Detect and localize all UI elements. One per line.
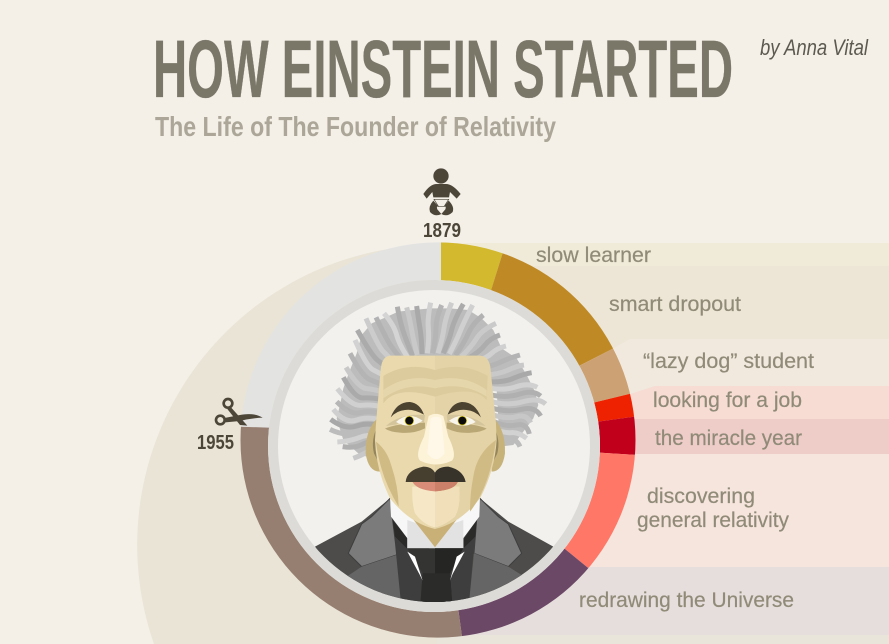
background crescent [137,245,437,644]
timeline bands [437,243,889,644]
suit and shirt [315,498,553,610]
label: redrawing the Universe: redrawing the Universe [579,589,794,612]
subtitle: The Life of The Founder of Relativity [155,111,556,142]
face [375,356,497,529]
byline: by Anna Vital [760,35,869,60]
portrait disc [268,280,600,612]
label: the miracle year: the miracle year [655,427,802,450]
label: discovering general relativity [637,485,789,532]
label: discovering general relativity: general relativity [637,509,789,532]
icon: baby [423,168,461,215]
life ring [240,242,636,638]
hair [330,303,546,460]
label: slow learner: slow learner [536,244,651,267]
label: smart dropout: smart dropout [609,293,741,316]
label: lazy dog student: “lazy dog” student [643,350,814,373]
icon: scissors [216,399,263,426]
mustache and lip [406,467,466,491]
infographic canvas [137,39,889,644]
portrait of Einstein [315,303,553,610]
birth year: 1879 [423,220,461,242]
ears [366,418,505,472]
death year: 1955 [197,432,234,454]
nose [418,414,454,464]
right eye and brow [447,402,487,433]
left eye and brow [385,402,425,433]
label: looking for a job: looking for a job [653,389,802,412]
label: discovering general relativity: discovering [647,485,755,508]
